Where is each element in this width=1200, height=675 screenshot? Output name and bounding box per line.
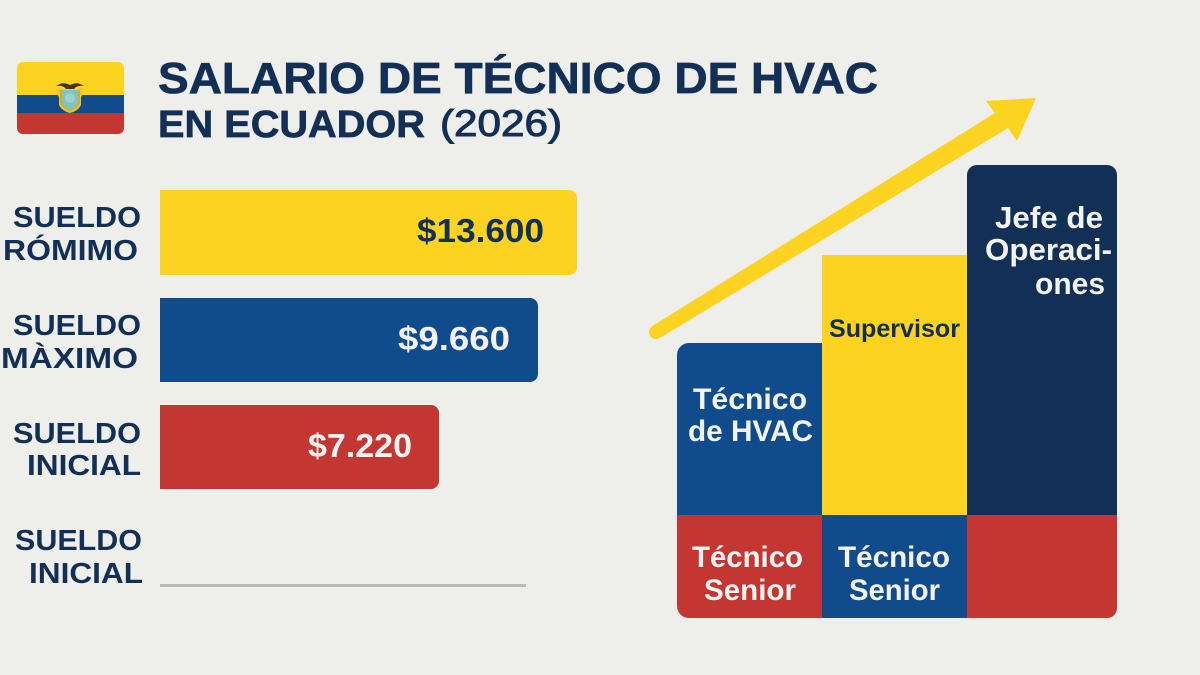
title line 2: EN ECUADOR — [158, 104, 425, 146]
block: jefe de operaciones: Jefe de — [995, 200, 1103, 235]
title — [158, 53, 878, 146]
career ladder chart — [677, 165, 1117, 618]
bar chart: salaries — [1, 190, 577, 590]
block: técnico de HVAC: de HVAC — [688, 415, 813, 448]
block: técnico senior, blue: Técnico — [838, 541, 950, 574]
row: sueldo inicial — [13, 405, 439, 489]
block: técnico senior, red: Senior — [704, 574, 796, 607]
bar — [160, 298, 538, 382]
label: SUELDO — [15, 525, 142, 557]
block: supervisor: Supervisor — [829, 315, 960, 343]
label: SUELDO — [13, 310, 141, 342]
block: jefe de operaciones — [967, 165, 1117, 515]
title line 1: SALARIO DE TÉCNICO DE HVAC — [158, 53, 878, 103]
value: $13.600 — [417, 212, 544, 249]
title line 2: (2026) — [440, 103, 562, 144]
block: técnico senior, red: Técnico — [692, 541, 803, 574]
label: INICIAL — [27, 450, 141, 482]
block: técnico senior, blue — [822, 515, 967, 618]
value: $9.660 — [398, 320, 510, 357]
block: jefe de operaciones: Operaci- — [985, 232, 1112, 267]
block: técnico de HVAC — [677, 343, 822, 515]
block: supervisor — [822, 255, 967, 515]
block: jefe de operaciones: ones — [1035, 266, 1105, 301]
label: INICIAL — [29, 558, 143, 590]
bar — [160, 405, 439, 489]
row: sueldo inicial, empty — [15, 525, 526, 590]
block: técnico senior, blue: Senior — [849, 574, 940, 607]
arrow: growth — [649, 98, 1036, 339]
bar — [160, 190, 577, 275]
row: sueldo rómimo — [3, 190, 577, 275]
label: SUELDO — [13, 418, 141, 450]
block: empty red — [967, 515, 1117, 618]
row: sueldo máximo — [1, 298, 538, 382]
label: SUELDO — [13, 202, 141, 234]
label: MÀXIMO — [1, 341, 138, 375]
empty bar line — [160, 584, 526, 587]
label: RÓMIMO — [3, 233, 138, 267]
block: técnico de HVAC: Técnico — [693, 383, 807, 416]
value: $7.220 — [308, 427, 412, 464]
icon: Ecuador flag — [17, 62, 124, 134]
block: técnico senior, red — [677, 515, 822, 618]
